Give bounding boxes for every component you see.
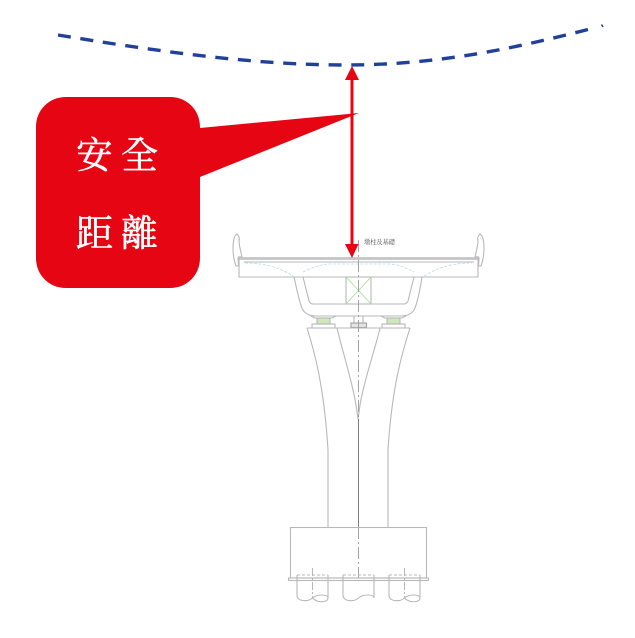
callout text: 離 — [121, 213, 158, 255]
callout text: 距 — [76, 214, 113, 255]
callout — [36, 97, 359, 288]
callout text — [76, 135, 158, 255]
double arrow: safety distance — [345, 66, 359, 258]
callout bubble — [36, 97, 359, 288]
dashed cable line — [58, 24, 603, 65]
pier — [307, 328, 410, 527]
box girder — [294, 277, 422, 316]
deck slab — [239, 258, 478, 277]
left parapet — [233, 234, 242, 266]
bridge section drawing — [233, 234, 484, 602]
right parapet — [475, 234, 484, 266]
center line — [358, 240, 360, 419]
piles — [297, 568, 420, 602]
callout text: 全 — [121, 136, 158, 177]
drawing label: 墩柱及基礎 — [364, 237, 396, 246]
center bearing — [351, 316, 366, 328]
right bearing — [381, 316, 406, 328]
left bearing — [311, 316, 336, 328]
cross diaphragm — [346, 277, 371, 304]
callout text: 安 — [76, 135, 113, 177]
light blue tendon lines — [245, 263, 472, 276]
pile cap — [288, 528, 428, 580]
